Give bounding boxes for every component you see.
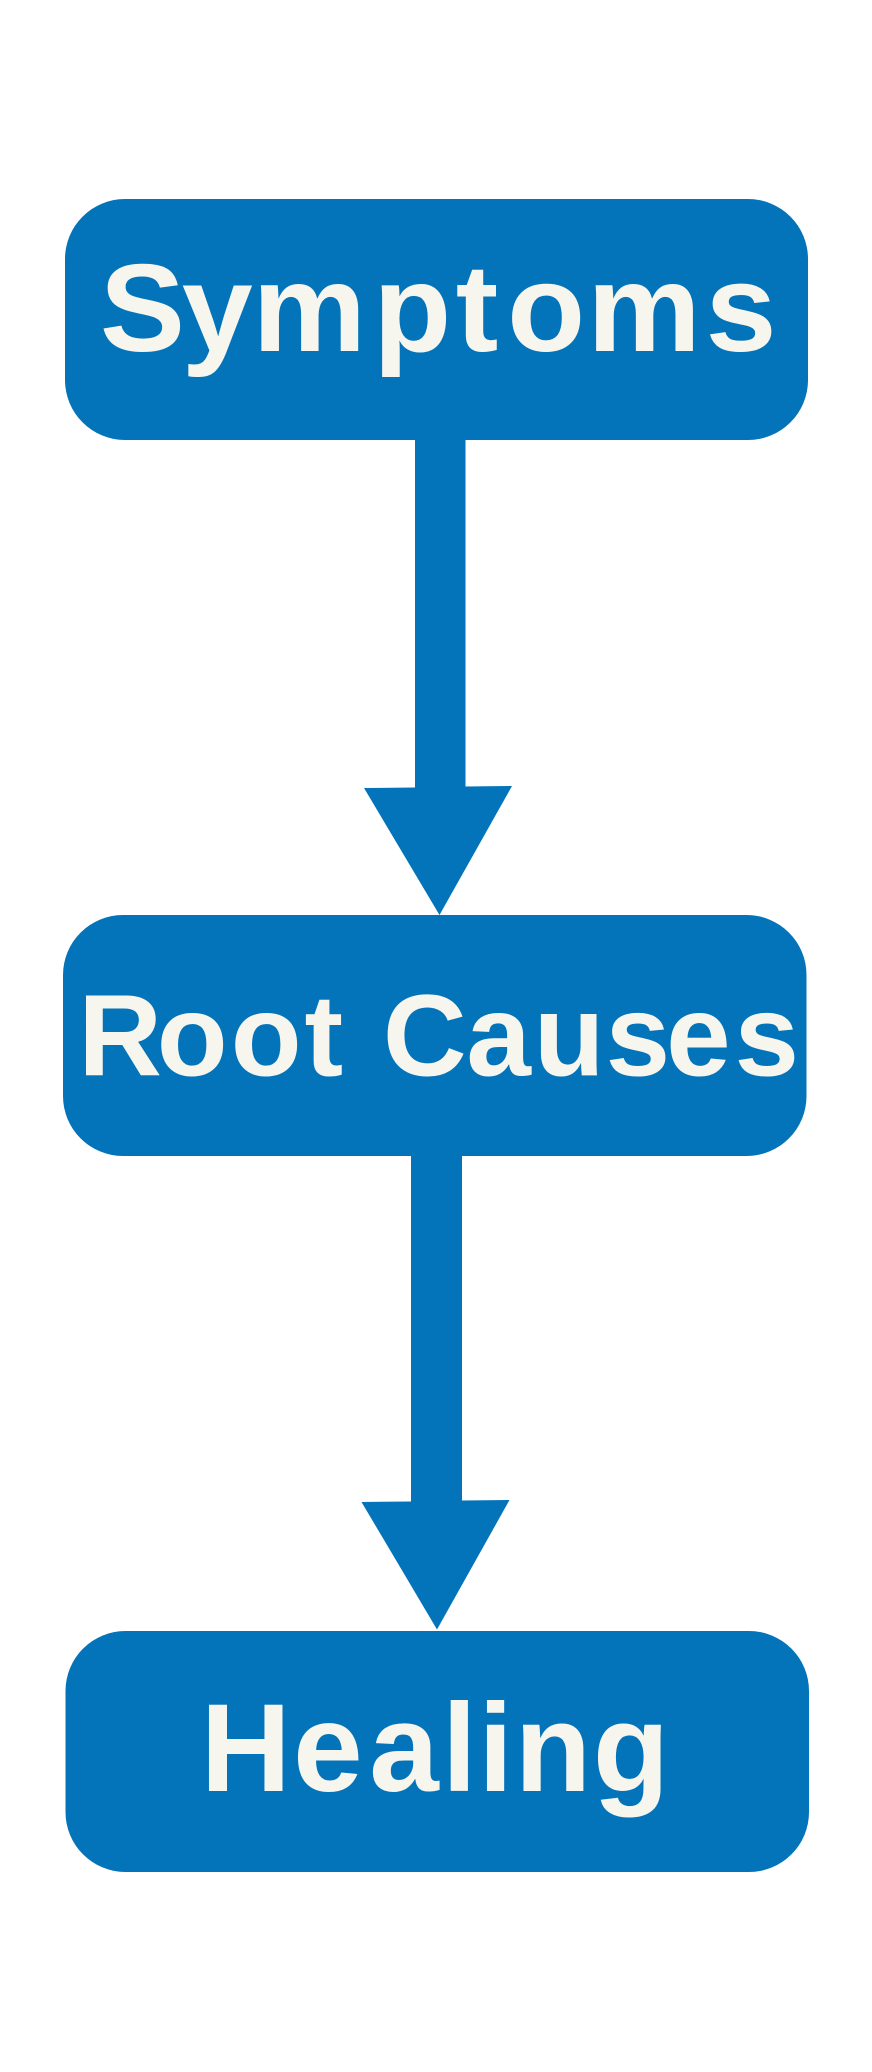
- heading: symptoms: Symptoms: [100, 239, 777, 378]
- panel: healing: [66, 1631, 809, 1872]
- heading: root causes: Root Causes: [78, 970, 799, 1100]
- panel: symptoms: [65, 199, 808, 440]
- heading: healing: Healing: [201, 1679, 669, 1818]
- arrow: symptoms to root causes: [364, 436, 512, 915]
- panel: root causes: [63, 915, 806, 1156]
- arrow: root causes to healing: [362, 1152, 510, 1630]
